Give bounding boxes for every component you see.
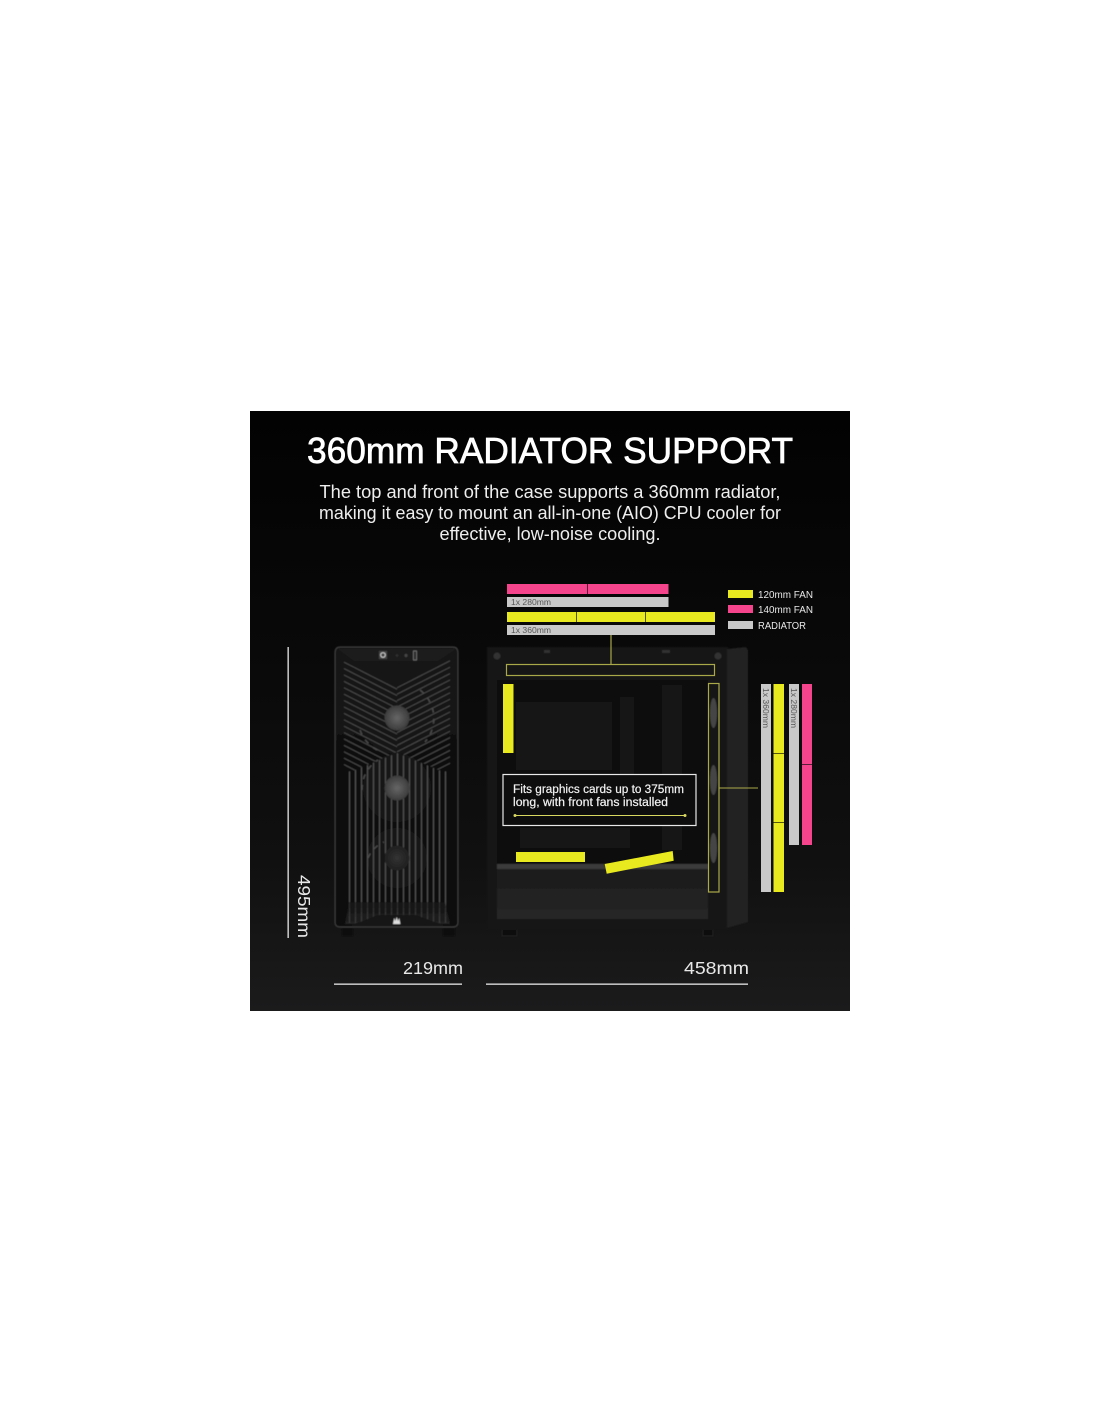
280mm radiator bar xyxy=(507,597,668,607)
top radiator mount outline xyxy=(506,664,714,676)
360mm radiator vertical bar: 1x 360mm xyxy=(761,688,771,728)
360mm radiator vertical bar xyxy=(761,684,771,892)
callout text: Fits graphics cards up to 375mm xyxy=(513,784,684,796)
motherboard tray xyxy=(516,685,682,850)
top chevron grille xyxy=(344,660,450,771)
legend: RADIATOR xyxy=(758,620,806,632)
text block: description: effective, low-noise cooling. xyxy=(440,524,660,544)
legend: 120mm FAN xyxy=(758,589,813,601)
callout: graphics card length xyxy=(503,774,696,826)
fan rim highlights xyxy=(360,690,434,858)
140mm fans vertical bar xyxy=(802,684,812,845)
connector line: top xyxy=(610,635,612,664)
bottom logo plate xyxy=(345,902,450,926)
top fan bars xyxy=(507,584,715,635)
text block: description xyxy=(319,482,781,544)
140mm fans bar xyxy=(507,584,668,594)
front view of case xyxy=(335,647,458,936)
front panel body xyxy=(335,647,458,927)
vertical grille bars xyxy=(345,753,451,923)
fan glow xyxy=(361,682,433,888)
PSU shroud xyxy=(497,864,708,919)
right fan bars xyxy=(761,684,812,892)
legend xyxy=(728,589,813,632)
dimension: width xyxy=(334,958,463,985)
280mm radiator vertical bar xyxy=(789,684,799,845)
text block: description: The top and front of the case supports a 360mm radiator, xyxy=(320,482,780,502)
side view of case xyxy=(487,647,748,936)
120mm fans bar xyxy=(507,612,715,622)
280mm radiator vertical bar: 1x 280mm xyxy=(789,688,799,728)
yellow fan slot: tilted xyxy=(605,851,674,874)
front radiator mount outline xyxy=(708,684,719,892)
callout arrow xyxy=(514,814,686,817)
front panel side xyxy=(727,647,748,928)
dimension: height: 495mm xyxy=(294,875,314,938)
chassis body xyxy=(487,647,728,930)
panel: infographic background xyxy=(250,411,850,1011)
yellow fan slot: shroud xyxy=(516,852,585,862)
legend: 140mm FAN xyxy=(758,604,813,616)
connector line: front xyxy=(719,787,758,789)
top screw details xyxy=(494,650,722,660)
280mm radiator bar: 1x 280mm xyxy=(511,597,551,607)
case feet xyxy=(502,927,713,936)
top I/O bar xyxy=(338,649,456,661)
fan hubs xyxy=(384,706,410,870)
yellow fan slot: rear xyxy=(503,684,514,753)
front fans seen from side xyxy=(710,698,717,863)
text block: description: making it easy to mount an all-in-one (AIO) CPU cooler for xyxy=(319,503,781,523)
case feet xyxy=(342,926,455,936)
360mm radiator bar: 1x 360mm xyxy=(511,625,551,635)
title: 360mm RADIATOR SUPPORT xyxy=(307,430,793,471)
interior xyxy=(497,680,708,864)
callout text: long, with front fans installed xyxy=(513,797,668,809)
dimension: depth: 458mm xyxy=(684,958,749,978)
dimension: width: 219mm xyxy=(403,958,463,978)
callout text xyxy=(513,784,684,809)
120mm fans vertical bar xyxy=(774,684,784,892)
360mm radiator bar xyxy=(507,625,715,635)
